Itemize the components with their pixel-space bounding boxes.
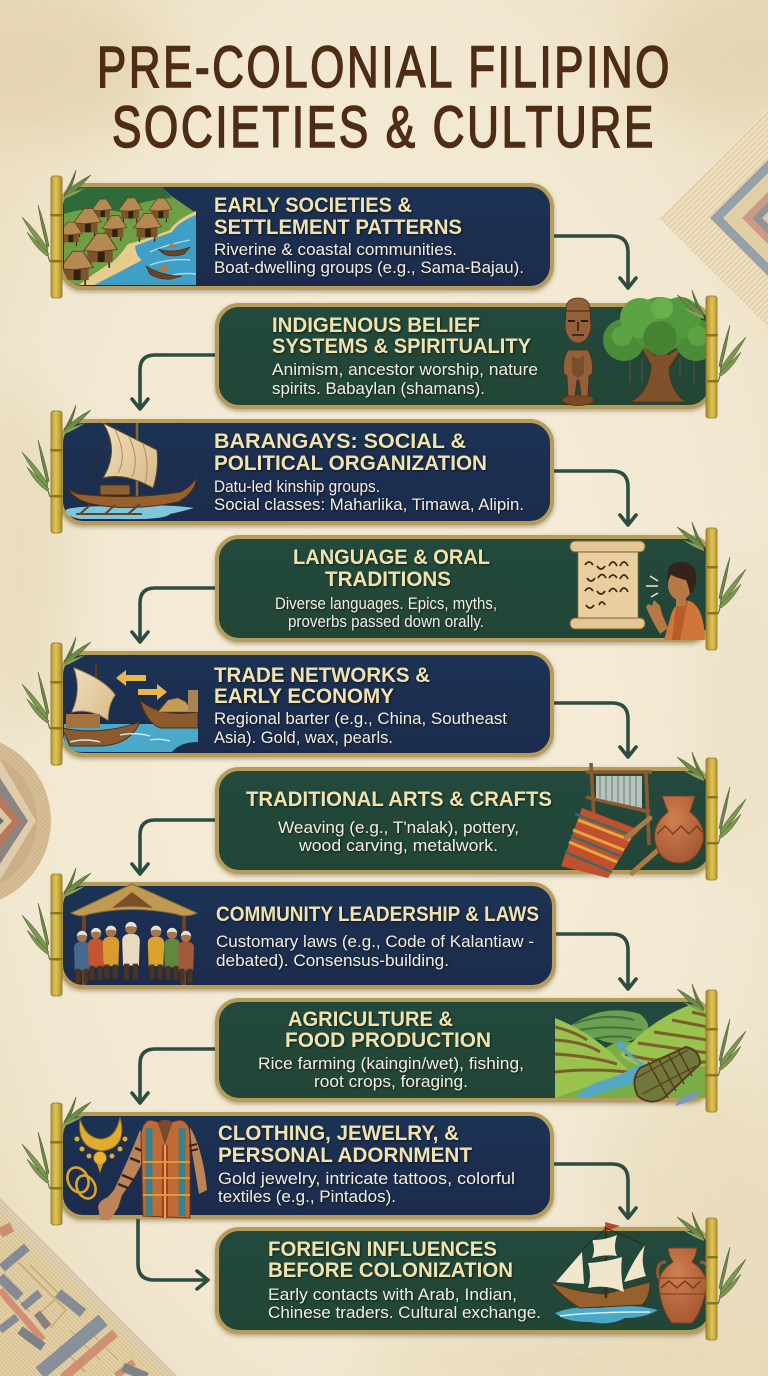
heading: TRADITIONAL ARTS & CRAFTS [246, 787, 552, 811]
panel: clothing and jewelry [22, 1097, 552, 1225]
illustration: loom, woven cloth and clay pot [561, 763, 703, 878]
heading [268, 1237, 513, 1282]
description: Chinese traders. Cultural exchange. [268, 1304, 541, 1322]
description: root crops, foraging. [314, 1073, 468, 1091]
description [218, 1170, 515, 1206]
description: Regional barter (e.g., China, Southeast [214, 710, 507, 728]
card background [217, 305, 711, 407]
heading: BARANGAYS: SOCIAL & [214, 429, 466, 453]
heading [214, 663, 430, 708]
panel: foreign influences [217, 1212, 746, 1340]
panel: language and oral traditions [217, 522, 746, 650]
arrow: step 6 to 7 [132, 820, 215, 874]
description: Datu-led kinship groups. [214, 478, 380, 496]
heading [218, 1121, 472, 1167]
arrow: step 9 to 10 [554, 1164, 636, 1218]
description: Riverine & coastal communities. [214, 241, 457, 259]
bamboo post [22, 868, 91, 996]
heading: BEFORE COLONIZATION [268, 1258, 513, 1282]
description [214, 478, 524, 514]
heading [293, 545, 490, 591]
description: Boat-dwelling groups (e.g., Sama-Bajau). [214, 259, 524, 277]
title [97, 35, 672, 160]
arrow: step 7 to 8 [556, 934, 636, 989]
bamboo post [22, 405, 91, 533]
bamboo post [677, 290, 746, 418]
heading: SETTLEMENT PATTERNS [214, 215, 462, 239]
illustration: trading boats [62, 664, 198, 752]
description [214, 710, 507, 747]
card background [61, 1114, 552, 1217]
panel: agriculture [217, 984, 746, 1112]
heading: LANGUAGE & ORAL [293, 545, 490, 569]
description: debated). Consensus-building. [216, 952, 449, 970]
description: Weaving (e.g., T'nalak), pottery, [278, 819, 519, 837]
heading: CLOTHING, JEWELRY, & [218, 1121, 459, 1145]
illustration: gold necklace, bangles and embroidered garment [63, 1117, 207, 1220]
illustration: rice terraces and fish trap [555, 1005, 708, 1106]
bamboo post [677, 984, 746, 1112]
description: Rice farming (kaingin/wet), fishing, [258, 1055, 524, 1073]
card background [217, 537, 711, 640]
description: Diverse languages. Epics, myths, [275, 595, 497, 613]
heading: SYSTEMS & SPIRITUALITY [272, 334, 531, 358]
heading: INDIGENOUS BELIEF [272, 313, 480, 337]
panel: indigenous beliefs [217, 290, 746, 418]
heading: AGRICULTURE & [288, 1007, 453, 1031]
description: spirits. Babaylan (shamans). [272, 380, 485, 398]
description: wood carving, metalwork. [298, 837, 498, 855]
bamboo post [677, 752, 746, 880]
heading: FOREIGN INFLUENCES [268, 1237, 497, 1261]
heading: PERSONAL ADORNMENT [218, 1143, 472, 1167]
description [268, 1286, 541, 1322]
card background [217, 1229, 711, 1332]
heading: TRADE NETWORKS & [214, 663, 430, 687]
heading: POLITICAL ORGANIZATION [214, 451, 487, 475]
card background [61, 653, 552, 755]
arrow: step 5 to 6 [554, 703, 636, 757]
heading [272, 313, 531, 358]
description [275, 595, 497, 631]
description: Customary laws (e.g., Code of Kalantiaw - [216, 933, 534, 951]
description [278, 819, 519, 855]
description: Social classes: Maharlika, Timawa, Alipin. [214, 496, 524, 514]
description [258, 1055, 524, 1091]
description: Early contacts with Arab, Indian, [268, 1286, 517, 1304]
arrow: step 3 to 4 [554, 471, 636, 525]
illustration: coastal village [59, 185, 196, 287]
arrow: step 2 to 3 [132, 355, 215, 409]
description [216, 933, 534, 970]
heading: COMMUNITY LEADERSHIP & LAWS [216, 902, 539, 926]
description [214, 241, 524, 277]
arrow: step 8 to 9 [132, 1049, 215, 1103]
panel: trade networks [22, 637, 552, 765]
illustration: trade arrows [116, 670, 167, 700]
card background [61, 884, 554, 987]
description: Animism, ancestor worship, nature [272, 361, 538, 379]
card background [217, 769, 711, 872]
bamboo post [677, 1212, 746, 1340]
panel: early societies [22, 170, 552, 298]
heading [214, 193, 462, 239]
heading: TRADITIONS [325, 567, 451, 591]
panel: community leadership [22, 868, 554, 996]
arrow: step 1 to 2 [554, 236, 636, 288]
panel: traditional arts and crafts [217, 752, 746, 880]
description: Asia). Gold, wax, pearls. [214, 729, 393, 747]
card background [217, 1000, 711, 1100]
description: proverbs passed down orally. [288, 613, 484, 631]
bamboo post [22, 1097, 91, 1225]
bamboo post [677, 522, 746, 650]
arrow: step 4 to 5 [132, 588, 215, 642]
description [272, 361, 538, 398]
bamboo post [22, 170, 91, 298]
decoration: woven chevron top right [659, 110, 768, 327]
illustration: carved anito figure and balete tree [562, 297, 717, 406]
decoration: woven basket left [0, 735, 51, 907]
heading: EARLY ECONOMY [214, 684, 394, 708]
heading [285, 1007, 491, 1052]
panel: barangays [22, 405, 552, 533]
heading: FOOD PRODUCTION [285, 1028, 491, 1052]
heading [214, 429, 487, 475]
arrow: step 9 to 10 lower route [138, 1218, 208, 1289]
illustration: elders under a thatched hut [71, 884, 197, 985]
decoration: woven mat bottom left [0, 1190, 180, 1376]
illustration: balangay boat [66, 422, 196, 519]
bamboo post [22, 637, 91, 765]
heading: EARLY SOCIETIES & [214, 193, 412, 217]
illustration: baybayin scroll and storyteller [570, 541, 705, 640]
description: textiles (e.g., Pintados). [218, 1188, 396, 1206]
illustration: trading ship and clay jar [550, 1222, 708, 1323]
description: Gold jewelry, intricate tattoos, colorful [218, 1170, 515, 1188]
card background [61, 185, 552, 288]
card background [61, 421, 552, 523]
